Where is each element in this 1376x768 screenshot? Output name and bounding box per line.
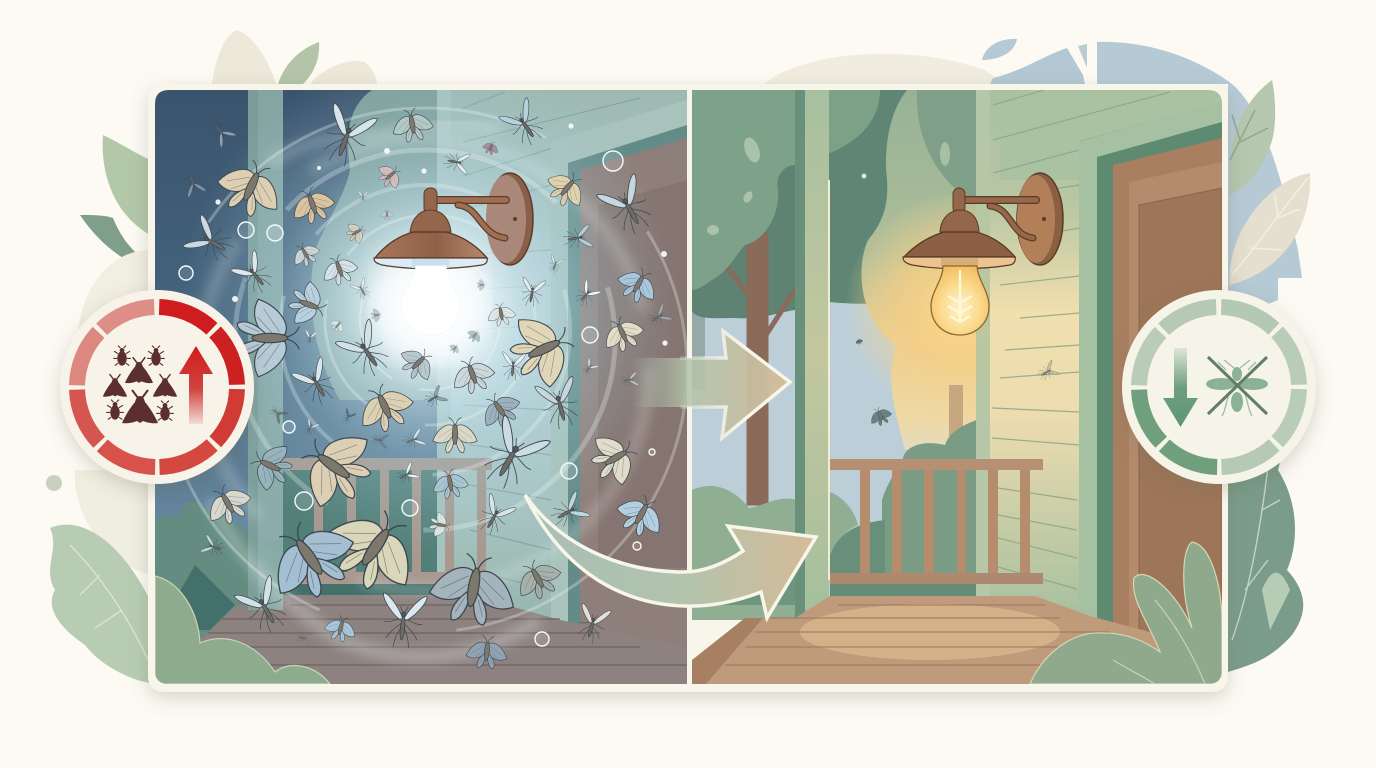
foreground plant right [1030,542,1222,684]
light pool on floor [800,604,1060,660]
floor [155,595,687,690]
lamp dome and shade [940,210,979,232]
swirling motion rings [163,108,687,657]
red progress ring [77,307,237,467]
clapboard wall [990,90,1080,620]
teal foliage glow shape [311,90,437,400]
down arrow [1163,348,1198,427]
green progress ring [1139,307,1299,467]
panel: before, cool white bulb swarmed by insects [155,90,687,690]
arrow: curved transition [525,495,816,618]
center divider [687,84,692,692]
dark area behind railing [283,470,437,540]
night sky background [155,90,437,540]
lamp dome and shade [410,210,451,232]
swarm of moths and mosquitoes [180,97,673,670]
railing [830,459,1043,596]
railing [280,458,492,584]
up arrow [179,346,213,424]
crossed insect icon [1206,357,1268,416]
background foliage: right and top [760,39,1310,672]
porch floor [692,596,1222,684]
shrub behind left [155,501,248,640]
tree trunk and branches [725,235,795,503]
porch post [795,90,806,620]
bulb and wall lamp [374,173,533,335]
foreground shrub left [155,576,330,684]
light tree canopy [692,90,795,290]
cold light glow [202,90,658,530]
badge: more insects [60,290,254,484]
door frame and door [1079,99,1222,625]
card frame [148,84,1228,692]
back dark tree [692,165,795,318]
sky background [692,302,908,596]
arrow: straight transition [630,331,790,438]
lower teal ground [155,672,166,684]
siding lines [463,92,640,590]
bush left [692,486,797,620]
white bulb [401,266,460,335]
porch post [248,90,283,610]
panel: after, warm bulb with few insects [692,90,1222,684]
lamp arm [960,196,1036,204]
floating bubbles and dots [179,123,668,646]
few insects [855,174,1060,429]
badge: fewer insects [1122,290,1316,484]
wall lamp warm [903,173,1063,335]
wall post [437,90,451,610]
lamp backplate [487,173,533,265]
insect cluster icon [103,346,177,423]
lamp backplate [1017,173,1063,265]
door frame and door [551,100,687,640]
background foliage: left and top [46,30,377,683]
leaf details [707,135,763,235]
warm sage tree blob [861,90,976,450]
clapboard wall [450,90,687,620]
warm light glow [850,196,976,386]
filament [948,270,972,322]
lamp arm [430,196,506,204]
trunk and bush behind rail [949,385,963,437]
warm bulb [931,266,989,335]
sky strip shadow [692,300,705,390]
siding lines [992,90,1222,589]
